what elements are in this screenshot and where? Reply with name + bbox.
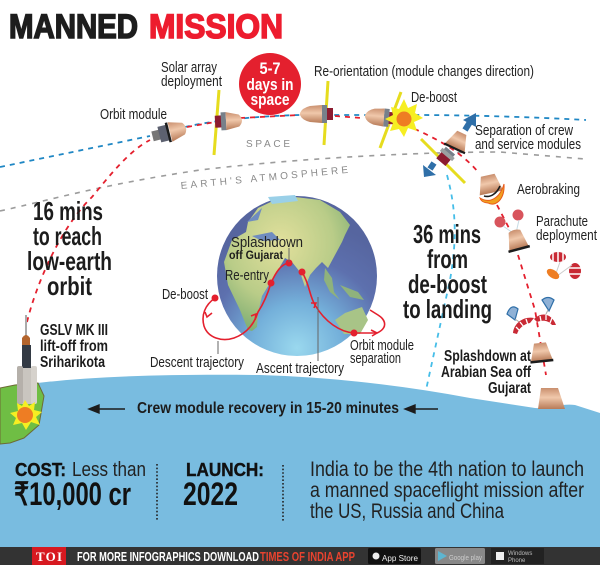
step labels: Solar array xyxy=(161,59,217,76)
icon: parachute cluster xyxy=(545,252,581,281)
globe markers xyxy=(212,260,358,336)
globe labels xyxy=(150,234,414,377)
globe labels: Orbit module xyxy=(350,337,414,354)
ascent path xyxy=(27,115,546,375)
icon: orbit module xyxy=(150,118,188,146)
title: MISSION xyxy=(149,8,283,46)
service module descent path xyxy=(426,175,455,390)
globe labels: Descent trajectory xyxy=(150,354,244,371)
TOI logo: TOI xyxy=(36,549,62,564)
text: splashdown at Arabian Sea: Splashdown at xyxy=(444,348,532,365)
globe labels: De-boost xyxy=(162,286,209,303)
footer bar xyxy=(0,547,600,565)
icon: lift-off flame xyxy=(10,400,42,430)
app store badges: Phone xyxy=(508,558,526,564)
text: 36 mins from de-boost to landing xyxy=(403,219,492,324)
launch block: LAUNCH: xyxy=(186,460,264,480)
globe labels: Re-entry xyxy=(225,267,269,284)
globe labels: off Gujarat xyxy=(229,248,283,262)
app store badges xyxy=(368,548,544,564)
launch block: 2022 xyxy=(183,476,238,512)
land masses xyxy=(224,197,350,331)
icon: drogue parachutes xyxy=(494,210,524,233)
icon: blue drogue parachutes xyxy=(507,298,554,324)
globe labels: Ascent trajectory xyxy=(256,360,344,377)
launch block xyxy=(183,460,264,512)
space labels xyxy=(180,139,349,192)
text: 36 mins from de-boost to landing: 36 mins xyxy=(413,219,481,249)
step labels xyxy=(100,59,598,244)
step labels: Separation of crew xyxy=(475,122,573,139)
text: 36 mins from de-boost to landing: from xyxy=(427,244,468,274)
title: MANNED xyxy=(9,8,138,46)
callout: 5-7 days in space xyxy=(239,53,301,115)
text: GSLV lift-off xyxy=(40,322,108,371)
orbit path in space xyxy=(0,115,586,167)
step labels: De-boost xyxy=(411,89,458,106)
crew recovery with arrows: Crew module recovery in 15-20 minutes xyxy=(137,400,399,417)
step labels: deployment xyxy=(161,73,223,90)
icon: solar array module xyxy=(214,90,242,155)
globe xyxy=(217,195,377,356)
land: Sriharikota xyxy=(0,383,44,444)
step labels: Orbit module xyxy=(100,106,167,123)
step labels: Aerobraking xyxy=(517,181,580,198)
icon: main parachutes xyxy=(513,314,556,334)
note text xyxy=(310,458,584,523)
icon: GSLV rocket xyxy=(10,315,42,430)
icon: de-boost module and burst xyxy=(364,92,423,148)
app store badges: Google play xyxy=(449,553,482,562)
callout: 5-7 days in space: space xyxy=(250,90,290,109)
space labels: SPACE xyxy=(246,139,290,150)
cost block xyxy=(14,459,146,512)
icon: re-oriented module xyxy=(300,81,333,145)
cost block: COST: xyxy=(15,460,66,480)
TOI logo xyxy=(32,547,66,565)
globe labels: Splashdown xyxy=(231,234,303,251)
globe trajectories xyxy=(203,263,385,340)
text: 36 mins from de-boost to landing: de-boost xyxy=(408,269,487,299)
footer bar: FOR MORE INFOGRAPHICS DOWNLOAD xyxy=(77,549,259,564)
step labels: Re-orientation (module changes direction) xyxy=(314,63,534,80)
callout: 5-7 days in space: 5-7 xyxy=(260,59,280,78)
sea background xyxy=(0,375,600,547)
text: 36 mins from de-boost to landing: to landing xyxy=(403,294,492,324)
atmosphere boundary xyxy=(0,152,585,211)
icon: separated crew module xyxy=(444,113,476,154)
text: splashdown at Arabian Sea: Arabian Sea off xyxy=(441,364,532,381)
note text: the US, Russia and China xyxy=(310,500,504,523)
space labels: EARTH'S ATMOSPHERE xyxy=(180,165,349,192)
title xyxy=(9,8,283,46)
text: GSLV lift-off: Sriharikota xyxy=(40,354,105,371)
icon: aerobraking capsule xyxy=(476,173,504,204)
text: 16 mins to reach low-earth orbit: to reach xyxy=(33,221,102,251)
cost block: ₹10,000 cr xyxy=(14,476,131,512)
text: 16 mins to reach low-earth orbit: 16 mins xyxy=(33,196,103,226)
text: GSLV lift-off: GSLV MK III xyxy=(40,322,108,339)
icon: capsule under drogues xyxy=(503,227,530,253)
text: 16 mins to reach low-earth orbit: orbit xyxy=(47,271,92,301)
leader lines xyxy=(218,248,318,361)
text: 16 mins to reach low-earth orbit xyxy=(27,196,112,301)
text: splashdown at Arabian Sea: Gujarat xyxy=(488,380,532,397)
text: GSLV lift-off: lift-off from xyxy=(40,338,108,355)
icon: splashed capsule xyxy=(538,388,565,409)
icon: separated service module xyxy=(421,139,465,183)
footer bar: TIMES OF INDIA APP xyxy=(260,549,355,564)
text: splashdown at Arabian Sea xyxy=(441,348,532,397)
cost block: Less than xyxy=(72,459,146,481)
globe labels: separation xyxy=(350,350,401,367)
app store badges: Windows xyxy=(508,551,532,557)
text: 16 mins to reach low-earth orbit: low-earth xyxy=(27,246,112,276)
callout: 5-7 days in space: days in xyxy=(246,75,294,94)
app store badges: App Store xyxy=(382,553,418,563)
icon: capsule descending xyxy=(529,342,553,364)
